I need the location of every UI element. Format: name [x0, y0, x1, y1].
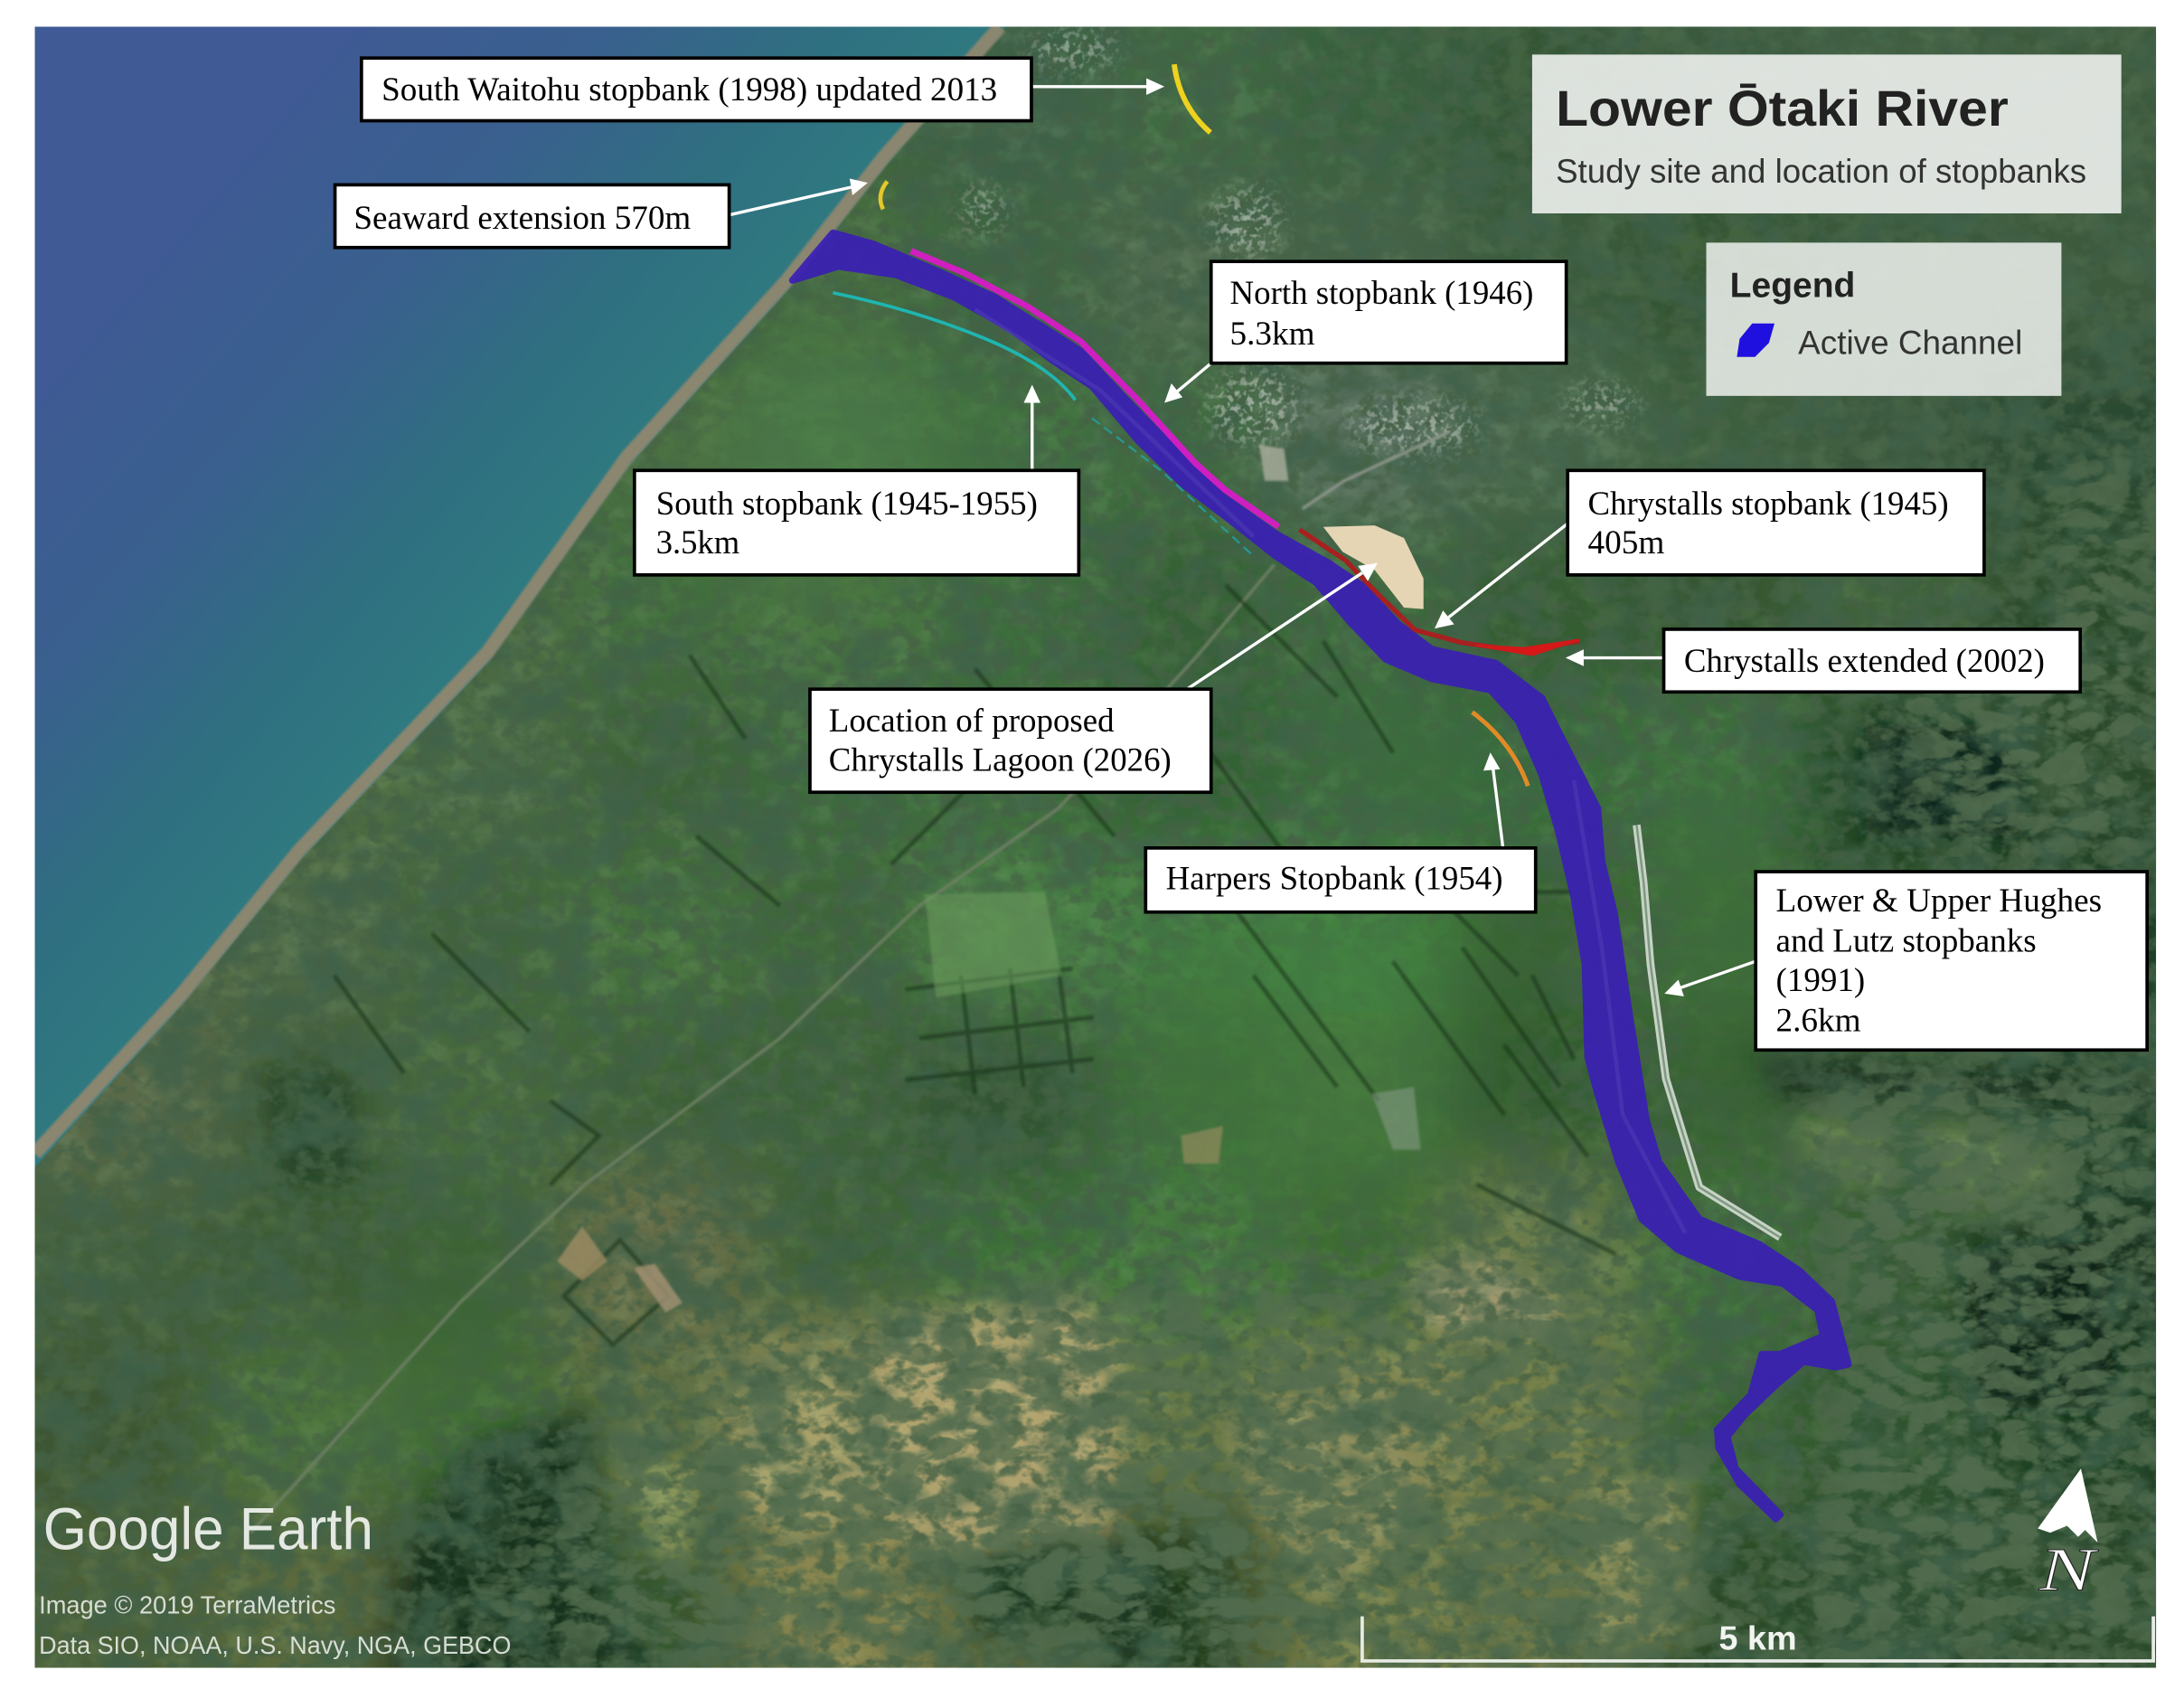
- callout: South Waitohu stopbank: [362, 58, 1031, 121]
- river: active channel: [793, 233, 1849, 1519]
- arrow: Chrystalls stopbank: [1435, 524, 1567, 628]
- arrow: South Waitohu: [1032, 79, 1164, 95]
- title panel: [1532, 54, 2122, 213]
- callout: proposed lagoon: [810, 689, 1211, 792]
- title panel: Study site and location of stopbanks: [1556, 153, 2086, 190]
- legend icon: active channel: [1737, 324, 1774, 357]
- callout: north stopbank: [1211, 261, 1567, 363]
- stopbank: Chrystalls: [1300, 530, 1579, 651]
- callout: proposed lagoon: Chrystalls Lagoon (2026): [829, 741, 1172, 778]
- callout: Hughes and Lutz stopbanks: (1991): [1776, 961, 1865, 999]
- north arrow: N: [2038, 1535, 2100, 1603]
- callout: Chrystalls extended: [1664, 629, 2080, 692]
- callout: Chrystalls extended: Chrystalls extended (2002): [1684, 642, 2045, 680]
- callout: Hughes and Lutz stopbanks: [1756, 872, 2147, 1050]
- callout: Harpers stopbank: Harpers Stopbank (1954): [1166, 859, 1503, 897]
- legend panel: [1707, 242, 2061, 396]
- arrow: Hughes and Lutz: [1664, 961, 1755, 996]
- callout: South Waitohu stopbank: South Waitohu stopbank (1998) updated 2013: [381, 71, 997, 109]
- arrow: Chrystalls extended: [1566, 649, 1663, 666]
- callout: Chrystalls stopbank: Chrystalls stopbank (1945): [1588, 485, 1949, 523]
- callout: south stopbank: South stopbank (1945-1955): [656, 485, 1038, 523]
- arrow: seaward extension: [730, 178, 868, 215]
- proposed Chrystalls Lagoon: [1323, 525, 1424, 609]
- callout: north stopbank: North stopbank (1946): [1230, 274, 1533, 312]
- callout: Chrystalls stopbank: 405m: [1588, 524, 1665, 561]
- legend panel: Legend: [1730, 266, 1855, 305]
- stopbank: south stopbank dashed continuation: [1092, 419, 1254, 556]
- arrow: south stopbank: [1023, 385, 1040, 470]
- stopbank: Harpers: [1473, 712, 1528, 786]
- callout: Harpers stopbank: [1145, 848, 1536, 912]
- coastline sand strip: [35, 27, 1000, 1154]
- data credit: Data SIO, NOAA, U.S. Navy, NGA, GEBCO: [39, 1631, 511, 1659]
- dark forest patches: [265, 724, 2156, 1668]
- callout: south stopbank: 3.5km: [656, 524, 739, 561]
- stopbank: north stopbank: [911, 251, 1278, 527]
- scale bar: 5 km: [1362, 1617, 2153, 1661]
- callout: south stopbank: [635, 470, 1078, 575]
- scale bar: 5 km: 5 km: [1718, 1620, 1797, 1657]
- callout: north stopbank: 5.3km: [1230, 315, 1315, 352]
- image credit: Image © 2019 TerraMetrics: [39, 1591, 335, 1619]
- arrow: proposed lagoon: [1188, 563, 1378, 688]
- stopbank: seaward extension: [880, 182, 888, 209]
- callout: Chrystalls stopbank: [1567, 470, 1984, 575]
- north arrow: [2038, 1468, 2100, 1603]
- stopbank: Hughes and Lutz: [1636, 825, 1780, 1238]
- callout: Hughes and Lutz stopbanks: Lower & Upper Hughes: [1776, 882, 2102, 919]
- arrow: Harpers stopbank: [1483, 752, 1503, 847]
- title panel: Lower Ōtaki River: [1556, 80, 2009, 137]
- legend panel: Active Channel: [1798, 325, 2022, 362]
- callout: Hughes and Lutz stopbanks: 2.6km: [1776, 1001, 1861, 1038]
- callout: Hughes and Lutz stopbanks: and Lutz stopbanks: [1776, 922, 2037, 959]
- callout: proposed lagoon: Location of proposed: [829, 702, 1115, 739]
- callout: seaward extension: [335, 184, 730, 248]
- stopbank: south stopbank line: [833, 293, 1076, 400]
- roads and field lines: [250, 432, 1615, 1533]
- tan hills: [616, 1115, 2061, 1658]
- sea: [35, 27, 1038, 1197]
- stopbank: Chrystalls extended: [1476, 640, 1579, 655]
- callout: seaward extension: Seaward extension 570m: [353, 199, 691, 236]
- arrow: north stopbank: [1164, 363, 1210, 403]
- Google Earth logo text: Google Earth: [43, 1496, 373, 1563]
- stopbank: south Waitohu: [1174, 64, 1210, 133]
